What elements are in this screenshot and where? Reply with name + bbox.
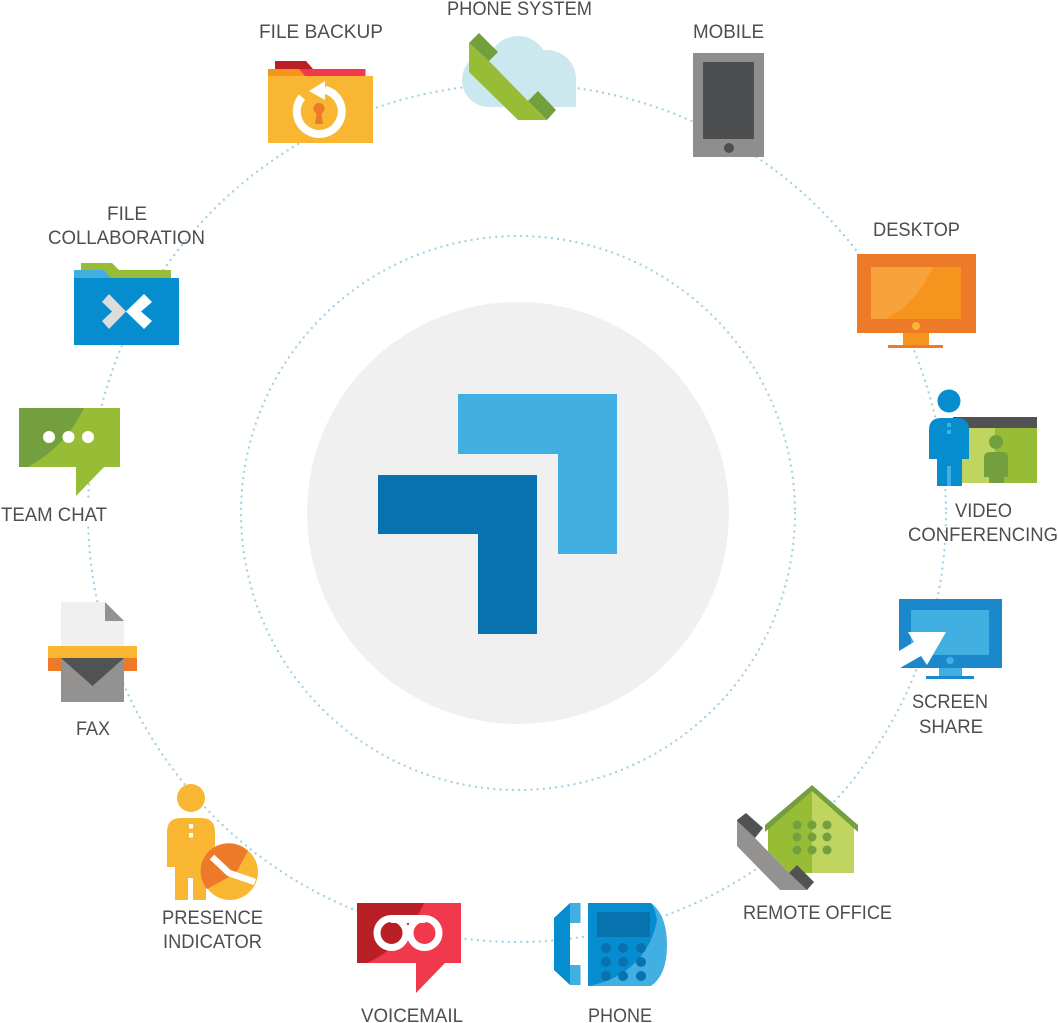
item: presence indicator: INDICATOR (163, 932, 262, 953)
label: fax: FAX (76, 719, 110, 740)
item: file collaboration (48, 204, 205, 345)
icon: chat bubble (19, 408, 120, 496)
logo: light blue bracket (458, 394, 617, 554)
item: video conferencing (908, 390, 1058, 546)
item: team chat (0, 408, 120, 526)
icon: tablet (693, 53, 764, 157)
item: remote office (737, 785, 892, 924)
item: video conferencing: CONFERENCING (908, 525, 1058, 546)
label: screen share: SCREEN (912, 692, 988, 713)
icon: video window (953, 417, 1037, 483)
item: fax (48, 602, 137, 740)
item: file backup (259, 22, 383, 143)
item: desktop (857, 220, 976, 348)
logo: dark blue bracket (378, 475, 537, 634)
item: mobile (693, 22, 764, 157)
icon: monitor (857, 254, 976, 348)
icon: shared monitor (899, 599, 1002, 679)
icon: gray handset (737, 813, 814, 890)
item: voicemail (357, 903, 463, 1023)
item: presence indicator (162, 784, 263, 953)
icon: house (765, 785, 858, 873)
icon: backup folder (268, 61, 373, 143)
central logo disc (307, 302, 729, 724)
icon: cloud phone (462, 33, 576, 120)
item: screen share (899, 599, 1002, 738)
label: video conferencing: VIDEO (955, 501, 1012, 522)
item: file collaboration: COLLABORATION (48, 228, 205, 249)
icon: voicemail bubble (357, 903, 461, 993)
icon: person (167, 784, 215, 900)
label: presence indicator: PRESENCE (162, 908, 263, 929)
icon: desk phone (554, 903, 667, 986)
item: phone (554, 903, 667, 1023)
label: file collaboration: FILE (107, 204, 147, 225)
label: remote office: REMOTE OFFICE (743, 903, 892, 924)
label: desktop: DESKTOP (873, 220, 960, 241)
label: team chat: TEAM CHAT (1, 505, 107, 526)
label: mobile: MOBILE (693, 22, 764, 43)
icon: fax machine (48, 602, 137, 702)
item: phone system (447, 0, 592, 120)
icon: collaboration folder (74, 263, 179, 345)
icon: presenter (929, 390, 969, 486)
icon: clock (201, 843, 258, 900)
label: file backup: FILE BACKUP (259, 22, 383, 43)
item: screen share: SHARE (919, 717, 983, 738)
